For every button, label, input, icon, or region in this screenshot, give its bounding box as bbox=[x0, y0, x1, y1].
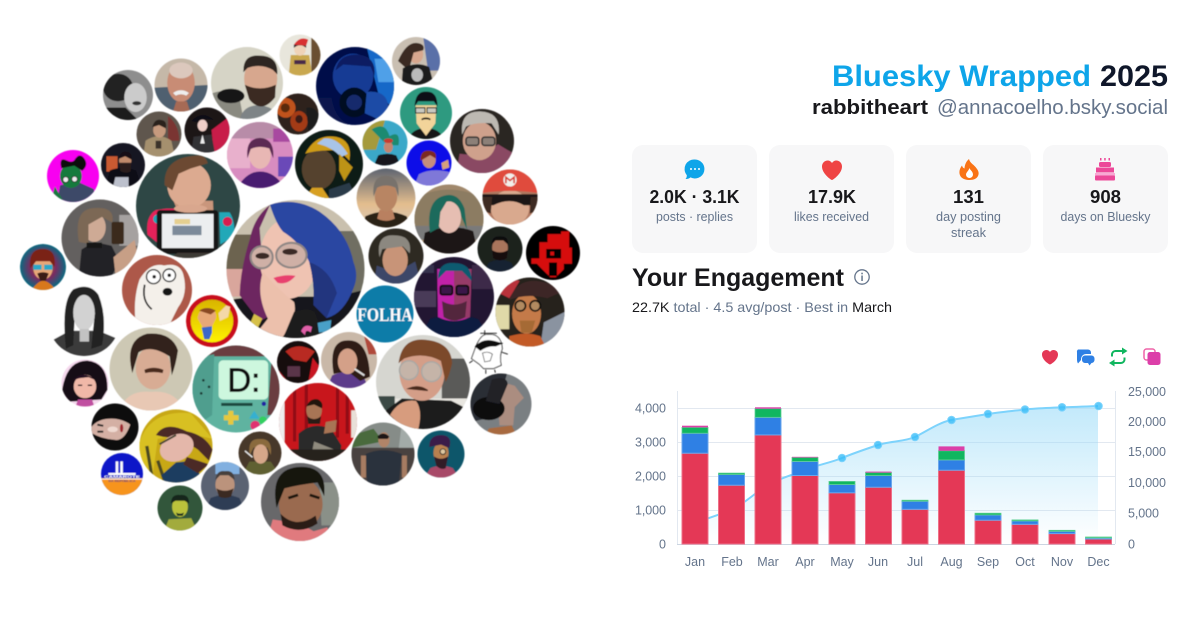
stat value: 131 bbox=[953, 187, 984, 207]
avatar: dark-haired woman lying bbox=[92, 404, 138, 450]
avatar: pink anime girl bbox=[62, 360, 108, 406]
avatar: snoopy-style dog bbox=[122, 255, 192, 325]
avatar: man with curly hair and moustache bbox=[110, 328, 192, 410]
icon: flame bbox=[959, 159, 979, 180]
avatar: mullet selfie bbox=[61, 200, 138, 276]
avatar: man at sunset bbox=[356, 168, 416, 228]
profile handle line bbox=[812, 97, 1168, 119]
avatar: santa hat cartoon bbox=[280, 34, 320, 76]
title: 2025 bbox=[1100, 60, 1168, 93]
avatar: blue background woman bbox=[406, 140, 452, 186]
bars: likes bbox=[682, 435, 1112, 544]
bars: quotes bbox=[682, 407, 964, 473]
avatar: folha logo bbox=[356, 286, 414, 342]
icon: heart bbox=[822, 160, 842, 180]
profile handle line: @annacoelho.bsky.social bbox=[937, 97, 1168, 119]
avatar: pink room woman bbox=[227, 122, 293, 188]
icon: quote bbox=[1144, 349, 1160, 365]
right axis labels: 0 bbox=[1128, 538, 1135, 552]
avatar: anime red and black bbox=[184, 108, 230, 152]
avatar: grey haired man bbox=[450, 109, 514, 173]
stat label: days on Bluesky bbox=[1060, 209, 1151, 224]
avatar: curly woman small bbox=[238, 432, 282, 474]
avatar cloud bbox=[20, 34, 580, 541]
stat label: streak bbox=[951, 225, 986, 240]
avatar: green duotone man bbox=[158, 486, 202, 530]
avatar: yellow scarf painting bbox=[295, 130, 363, 198]
profile handle line: rabbitheart bbox=[812, 97, 928, 119]
avatar: neon glasses man bbox=[414, 257, 494, 337]
avatar: BMO bbox=[192, 346, 280, 432]
stat value: 2.0K · 3.1K bbox=[650, 187, 740, 207]
avatar: camarote da republica logo bbox=[101, 453, 143, 495]
month labels: Feb bbox=[721, 555, 743, 569]
right axis labels: 10,000 bbox=[1128, 476, 1166, 490]
avatar: dark orange portrait bbox=[276, 94, 318, 134]
icon: repost bbox=[1109, 348, 1128, 366]
avatar: selfie woman with hair bbox=[392, 37, 440, 85]
month labels: Nov bbox=[1051, 555, 1074, 569]
avatar: camarote da republica logo: DA REPÚBLICA bbox=[108, 480, 136, 483]
line points bbox=[838, 402, 1102, 462]
right axis labels: 15,000 bbox=[1128, 445, 1166, 459]
avatar: bald man bbox=[154, 58, 208, 112]
month labels: Dec bbox=[1087, 555, 1110, 569]
right axis labels: 5,000 bbox=[1128, 506, 1159, 520]
month labels: Jan bbox=[685, 555, 705, 569]
avatar: woman with yellow hat bbox=[140, 410, 212, 482]
avatar: man in dark t-shirt bbox=[352, 422, 414, 486]
left axis labels: 1,000 bbox=[635, 504, 666, 518]
panel: likes received bbox=[769, 145, 894, 253]
avatar: black and white woman bbox=[103, 70, 153, 120]
chart legend bbox=[1042, 348, 1160, 366]
month labels: May bbox=[830, 555, 855, 569]
panel: days on bluesky bbox=[1043, 145, 1168, 253]
month labels: Oct bbox=[1015, 555, 1035, 569]
title: Bluesky Wrapped bbox=[832, 60, 1091, 93]
avatar: red curtain man bbox=[279, 383, 357, 461]
icon: chat bubble bbox=[685, 159, 704, 179]
left axis labels: 2,000 bbox=[635, 470, 666, 484]
left axis labels: 4,000 bbox=[635, 402, 666, 416]
avatar: hooded grey hair man bbox=[368, 228, 424, 284]
stat label: likes received bbox=[794, 209, 869, 224]
bars: replies bbox=[682, 417, 1112, 539]
stat label: day posting bbox=[936, 209, 1001, 224]
icon: reply bbox=[1077, 350, 1094, 366]
panel: day posting streak bbox=[906, 145, 1031, 253]
avatar: red dark crowd bbox=[277, 341, 319, 383]
avatar: man in beige shirt bbox=[136, 112, 182, 156]
month labels bbox=[685, 555, 1110, 569]
avatar: bottom man pink shirt bbox=[261, 463, 339, 541]
avatar: cartoon bearded man teal bbox=[418, 430, 464, 478]
avatar: curly hair woman bbox=[321, 332, 377, 388]
stat value: 908 bbox=[1090, 187, 1121, 207]
avatar: glasses man with moustache bbox=[376, 335, 470, 429]
month labels: Jul bbox=[907, 555, 923, 569]
left axis labels: 3,000 bbox=[635, 436, 666, 450]
avatar: teal cartoon man bbox=[400, 87, 452, 139]
chart: monthly engagement bars with cumulative line bbox=[635, 385, 1166, 569]
avatar: BMO: D: bbox=[227, 363, 260, 400]
right axis labels bbox=[1128, 385, 1166, 552]
stat label bbox=[936, 209, 1001, 240]
stat value: 17.9K bbox=[808, 187, 856, 207]
right axis labels: 20,000 bbox=[1128, 415, 1166, 429]
avatar: mario cap man bbox=[482, 170, 538, 226]
cumulative line bbox=[695, 406, 1098, 523]
avatar: green cartoon on magenta bbox=[47, 150, 99, 202]
avatar: green hair woman bbox=[414, 184, 484, 254]
avatar: blue camera portrait bbox=[316, 47, 394, 125]
avatar: folha logo: FOLHA bbox=[357, 305, 413, 326]
avatar: main profile woman with blue hair bbox=[226, 200, 364, 338]
month labels: Mar bbox=[757, 555, 779, 569]
cumulative area bbox=[695, 406, 1098, 544]
left axis labels: 0 bbox=[659, 538, 666, 552]
avatar: glasses man with cap in car bbox=[496, 278, 564, 346]
avatar: bearded man dark room bbox=[101, 143, 145, 187]
left axis labels bbox=[635, 402, 666, 552]
avatar: red pixel art bbox=[526, 226, 580, 280]
avatar: black and white long hair drawing bbox=[48, 284, 120, 356]
avatar: camarote da republica logo: CAMAROTE bbox=[104, 475, 141, 479]
right axis labels: 25,000 bbox=[1128, 385, 1166, 399]
avatar: man outdoors blue jacket bbox=[201, 462, 249, 510]
month labels: Sep bbox=[977, 555, 999, 569]
avatar: colourful small portrait bbox=[362, 120, 408, 166]
icon: info bbox=[855, 270, 869, 284]
bars: reposts bbox=[682, 409, 1112, 538]
avatar: sketch cartoon bbox=[469, 330, 508, 374]
avatar: anime profile side view bbox=[470, 374, 532, 434]
month labels: Jun bbox=[868, 555, 888, 569]
month labels: Apr bbox=[795, 555, 815, 569]
heading: your engagement: Your Engagement bbox=[632, 264, 845, 292]
avatar: red and yellow badge cartoon bbox=[186, 295, 238, 347]
icon: like bbox=[1042, 350, 1058, 364]
stat label: posts · replies bbox=[656, 209, 733, 224]
icon: cake bbox=[1095, 158, 1115, 180]
avatar: dark bearded man bbox=[478, 226, 522, 272]
panel: posts and replies bbox=[632, 145, 757, 253]
avatar: cartoon sunglasses on gradient bbox=[20, 244, 66, 290]
month labels: Aug bbox=[940, 555, 963, 569]
engagement summary: 22.7K total · 4.5 avg/post · Best in March bbox=[632, 299, 892, 315]
avatar: bearded man with cat bbox=[211, 47, 283, 119]
avatar: man holding nintendo switch bbox=[136, 154, 240, 258]
